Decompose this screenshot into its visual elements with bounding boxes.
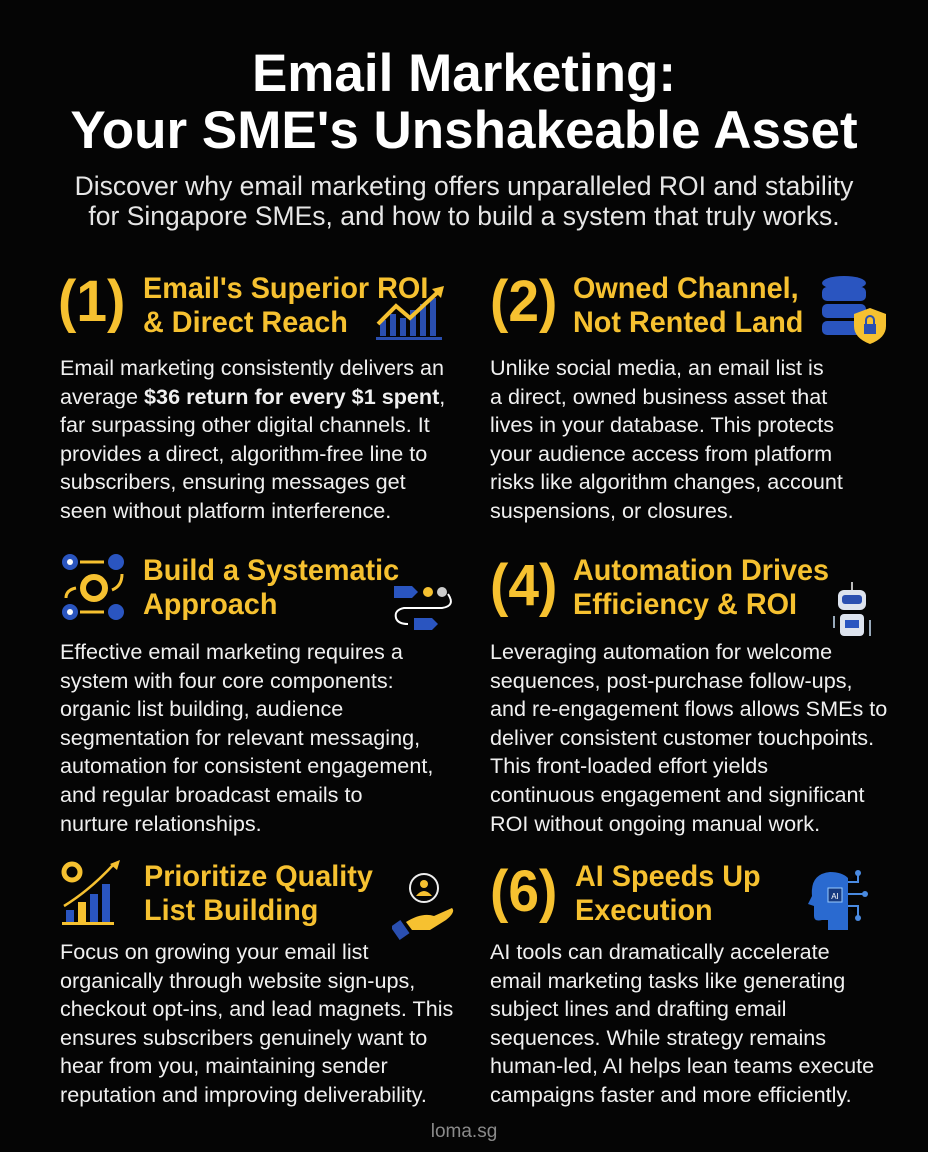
body 4: This front-loaded effort yields: [490, 753, 768, 778]
body 1: far surpassing other digital channels. It: [60, 412, 430, 437]
body 3: automation for consistent engagement,: [60, 753, 433, 778]
heading 3: [143, 554, 399, 621]
number 1: (1): [58, 269, 125, 334]
title: Email Marketing:: [252, 44, 676, 103]
number 2: (2): [490, 269, 557, 334]
body 3: segmentation for relevant messaging,: [60, 725, 420, 750]
body 3: and regular broadcast emails to: [60, 782, 362, 807]
body 6: email marketing tasks like generating: [490, 968, 845, 993]
heading 4: [573, 554, 829, 621]
heading 5: List Building: [144, 894, 318, 927]
heading 2: Owned Channel,: [573, 272, 799, 305]
icon: hand with person: [392, 873, 454, 940]
subtitle: Discover why email marketing offers unparalleled ROI and stability: [75, 171, 853, 201]
number 4: (4): [490, 553, 557, 618]
body 6: sequences. While strategy remains: [490, 1025, 826, 1050]
heading 1: Email's Superior ROI: [143, 272, 428, 305]
heading 1: & Direct Reach: [143, 306, 348, 339]
heading 6: Execution: [575, 894, 713, 927]
icon: growth chart: [376, 286, 444, 340]
body 4: [490, 639, 887, 836]
footer: loma.sg: [431, 1121, 497, 1142]
number 6: (6): [490, 859, 557, 924]
panel 3: [60, 554, 452, 836]
heading 5: [144, 860, 373, 927]
icon: chart with gear: [62, 860, 120, 925]
subtitle: [75, 171, 854, 231]
subtitle: for Singapore SMEs, and how to build a system that truly works.: [88, 201, 840, 231]
body 1: provides a direct, algorithm-free line to: [60, 441, 427, 466]
body 6: human-led, AI helps lean teams execute: [490, 1053, 874, 1078]
body 5: checkout opt-ins, and lead magnets. This: [60, 996, 453, 1021]
body 4: sequences, post-purchase follow-ups,: [490, 668, 852, 693]
panel 5: [60, 860, 454, 1107]
body 4: and re-engagement flows allows SMEs to: [490, 696, 887, 721]
icon: database with lock: [822, 276, 886, 344]
body 2: risks like algorithm changes, account: [490, 469, 843, 494]
panel 4: [490, 553, 887, 836]
body 6: campaigns faster and more efficiently.: [490, 1082, 852, 1107]
icon: AI head: AI: [831, 892, 839, 901]
heading 4: Efficiency & ROI: [573, 588, 797, 621]
heading 5: Prioritize Quality: [144, 860, 373, 893]
heading 6: [575, 860, 761, 927]
body 1: seen without platform interference.: [60, 498, 391, 523]
heading 2: [573, 272, 803, 339]
body 2: suspensions, or closures.: [490, 498, 734, 523]
body 4: continuous engagement and significant: [490, 782, 865, 807]
panel 1: [58, 269, 445, 523]
body 2: Unlike social media, an email list is: [490, 355, 824, 380]
body 5: organically through website sign-ups,: [60, 968, 415, 993]
panel 6: [490, 859, 874, 1107]
body 3: Effective email marketing requires a: [60, 639, 403, 664]
body 6: [490, 939, 874, 1107]
body 4: ROI without ongoing manual work.: [490, 811, 820, 836]
body 5: Focus on growing your email list: [60, 939, 368, 964]
heading 1: [143, 272, 428, 339]
body 1: subscribers, ensuring messages get: [60, 469, 406, 494]
panel 2: [490, 269, 886, 523]
body 1: Email marketing consistently delivers an: [60, 355, 444, 380]
body 5: [60, 939, 453, 1107]
body 1: [60, 355, 445, 523]
body 2: [490, 355, 843, 523]
heading 3: Build a Systematic: [143, 554, 399, 587]
heading 2: Not Rented Land: [573, 306, 803, 339]
body 1: average $36 return for every $1 spent,: [60, 384, 445, 409]
body 3: [60, 639, 433, 836]
body 6: subject lines and drafting email: [490, 996, 786, 1021]
body 5: ensures subscribers genuinely want to: [60, 1025, 427, 1050]
heading 6: AI Speeds Up: [575, 860, 761, 893]
body 4: Leveraging automation for welcome: [490, 639, 832, 664]
body 2: your audience access from platform: [490, 441, 832, 466]
body 3: nurture relationships.: [60, 811, 262, 836]
icon: AI head: [808, 870, 868, 930]
icon: workflow: [394, 586, 452, 630]
body 5: hear from you, maintaining sender: [60, 1053, 388, 1078]
icon: gears: [62, 554, 124, 620]
body 5: reputation and improving deliverability.: [60, 1082, 427, 1107]
body 6: AI tools can dramatically accelerate: [490, 939, 830, 964]
title: Your SME's Unshakeable Asset: [70, 101, 858, 160]
heading 4: Automation Drives: [573, 554, 829, 587]
title: [70, 44, 858, 160]
body 3: organic list building, audience: [60, 696, 343, 721]
body 2: lives in your database. This protects: [490, 412, 834, 437]
body 3: system with four core components:: [60, 668, 394, 693]
body 4: deliver consistent customer touchpoints.: [490, 725, 874, 750]
icon: robot: [833, 582, 871, 636]
body 2: a direct, owned business asset that: [490, 384, 827, 409]
heading 3: Approach: [143, 588, 277, 621]
